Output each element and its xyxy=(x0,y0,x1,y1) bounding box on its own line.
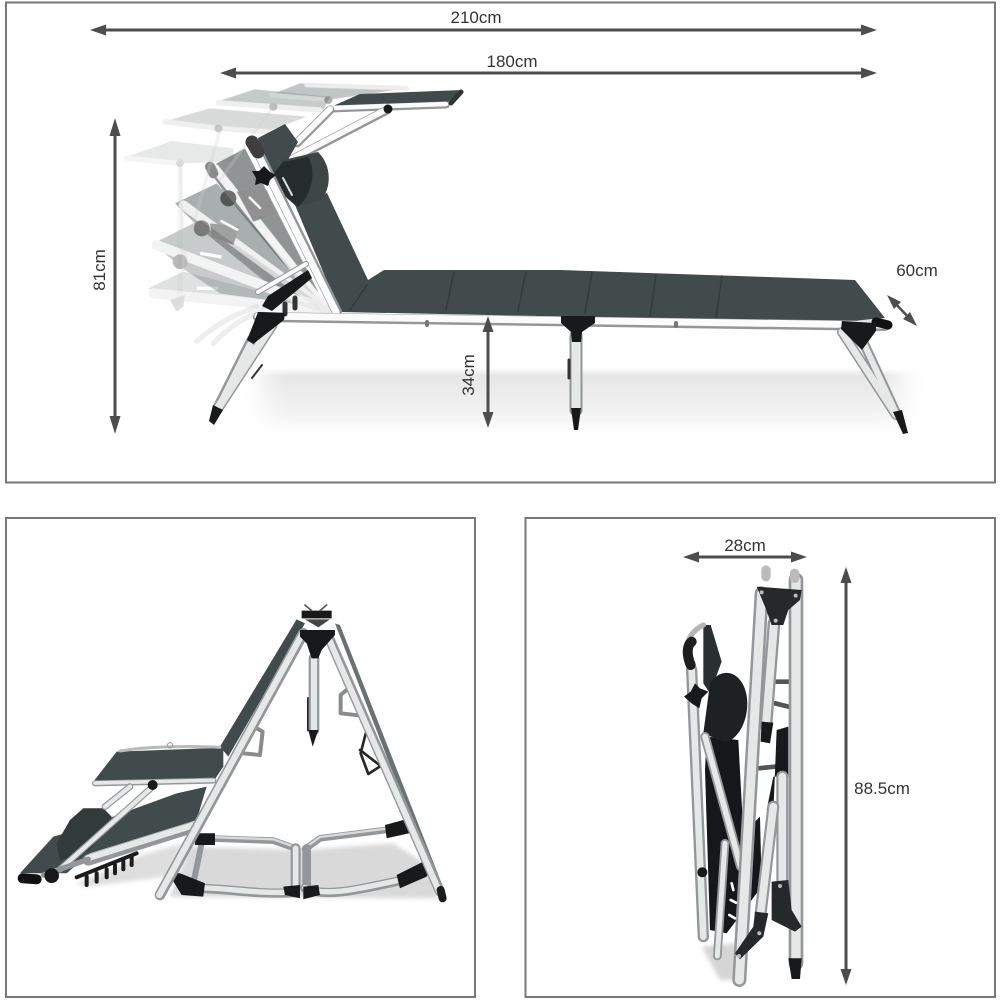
left vertical tube xyxy=(739,593,762,980)
floor shadow xyxy=(702,943,740,980)
top brackets xyxy=(300,605,335,658)
handles xyxy=(243,689,358,755)
dimension arrow: 81cm xyxy=(90,118,120,434)
dimension arrow: 88.5cm: 88.5cm xyxy=(854,779,910,798)
panel: half-folded lounger xyxy=(6,518,475,997)
front leg xyxy=(841,321,908,434)
dimension arrow: 210cm: 210cm xyxy=(450,8,502,27)
ghost positions of the backrest and canopy xyxy=(125,83,407,343)
pillow xyxy=(57,808,112,861)
adjustment rack xyxy=(258,264,312,314)
dimension arrow: 180cm xyxy=(220,52,877,78)
dimension arrow: 34cm xyxy=(459,316,494,428)
panel: fully folded lounger xyxy=(526,518,995,997)
folded bed rails, left half xyxy=(168,833,300,898)
dimension arrow: 210cm xyxy=(90,8,877,36)
upper backrest flap xyxy=(258,124,298,178)
rear leg xyxy=(209,312,285,425)
backrest and seat fabric xyxy=(295,193,885,322)
recline knob xyxy=(252,166,276,186)
backrest tubes xyxy=(684,625,741,937)
dimension arrow: 88.5cm xyxy=(840,567,910,985)
seam lines xyxy=(350,272,722,318)
dimension arrow: 81cm: 81cm xyxy=(90,249,109,291)
reclined backrest fabric xyxy=(20,787,207,873)
folded fabric xyxy=(703,625,762,933)
middle leg xyxy=(561,316,595,430)
canopy and strut xyxy=(272,90,462,170)
frame rivets xyxy=(427,322,676,326)
rods xyxy=(758,682,788,768)
right fabric sliver xyxy=(335,623,442,883)
strap xyxy=(308,698,381,774)
rack teeth xyxy=(77,853,137,885)
right vertical tube xyxy=(766,570,802,979)
inner tubes xyxy=(717,623,782,956)
canopy xyxy=(93,743,223,783)
back tube xyxy=(252,142,337,312)
main left tube xyxy=(159,633,303,895)
dimension arrow: 60cm: 60cm xyxy=(896,261,938,280)
rack teeth xyxy=(729,883,736,918)
dimension arrow: 180cm: 180cm xyxy=(486,52,538,71)
floor shadow xyxy=(77,843,438,898)
folded brackets xyxy=(735,587,802,959)
dimension arrow: 60cm xyxy=(887,261,938,326)
dimension arrow: 28cm xyxy=(683,536,807,562)
dimension arrow: 34cm: 34cm xyxy=(459,354,478,396)
ground shadow xyxy=(265,368,900,434)
centre leg xyxy=(308,658,318,747)
mid black hardware xyxy=(767,727,788,813)
headrest pillow xyxy=(268,152,329,207)
main frame tube xyxy=(258,316,888,326)
main right tube xyxy=(329,640,443,898)
canopy struts xyxy=(60,780,158,869)
dimension arrow: 28cm: 28cm xyxy=(724,536,766,555)
raised seat fabric xyxy=(220,619,305,757)
folded bed rails, right half xyxy=(303,820,432,899)
reclined frame tube xyxy=(23,825,193,883)
panel: lounger side view with dimensions xyxy=(6,2,995,482)
